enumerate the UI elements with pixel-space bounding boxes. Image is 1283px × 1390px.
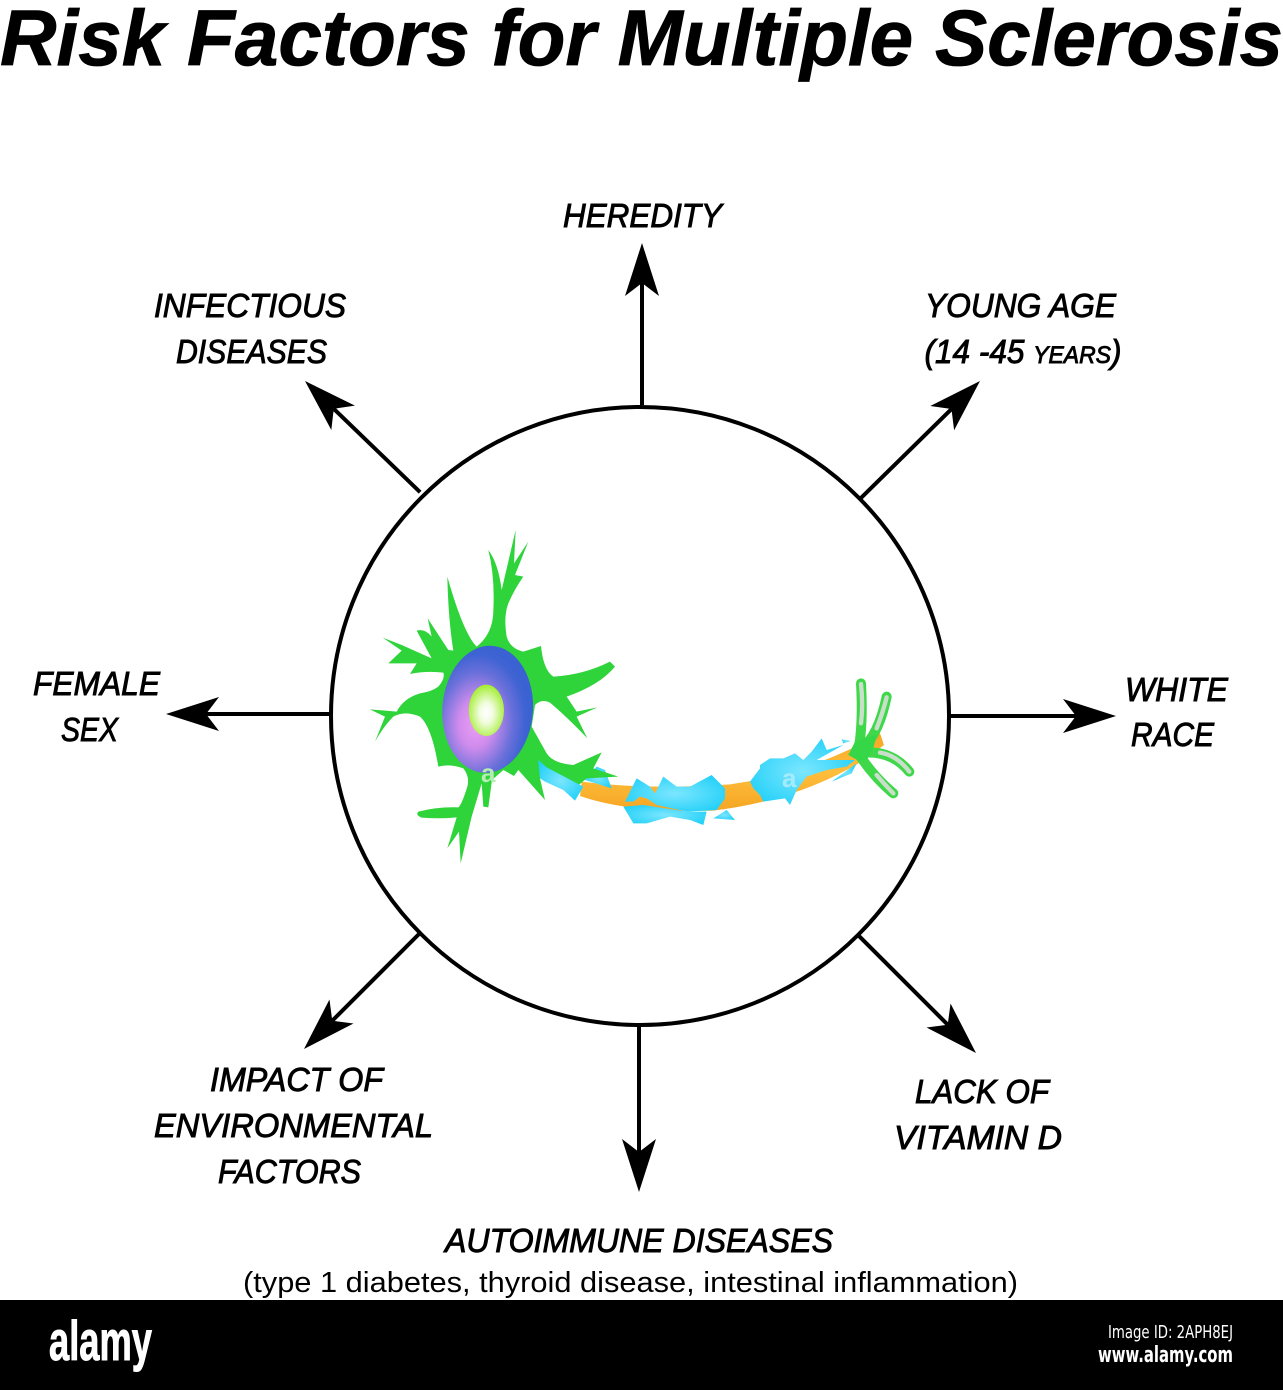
label: autoimmune diseases	[243, 1222, 1018, 1299]
label: lack of vitamin D	[894, 1073, 1062, 1156]
neuron illustration	[370, 530, 909, 863]
label: young age: (14 -45 YEARS)	[924, 333, 1122, 370]
arrow: autoimmune diseases	[622, 1026, 656, 1192]
nucleus	[469, 685, 504, 736]
footer logo: alamy	[49, 1309, 152, 1372]
footer bar	[0, 1300, 1283, 1390]
label: autoimmune diseases: AUTOIMMUNE DISEASES	[443, 1222, 833, 1259]
label: lack of vitamin D: VITAMIN D	[894, 1119, 1062, 1156]
image id: Image ID: 2APH8EJ	[1108, 1322, 1233, 1343]
axon core	[580, 733, 884, 811]
axon terminal hub	[848, 735, 877, 761]
label: environmental factors: FACTORS	[218, 1153, 361, 1190]
label: infectious diseases: DISEASES	[176, 333, 327, 370]
label: heredity: HEREDITY	[563, 197, 724, 234]
label: infectious diseases: INFECTIOUS	[154, 287, 346, 324]
arrow: female sex	[166, 697, 331, 731]
watermark letter on soma: a	[481, 758, 496, 788]
label: white race: WHITE	[1125, 671, 1229, 708]
label: lack of vitamin D: LACK OF	[915, 1073, 1051, 1110]
label: environmental factors: ENVIRONMENTAL	[154, 1107, 433, 1144]
arrow: lack of vitamin D	[846, 923, 988, 1065]
label: young age	[924, 287, 1122, 370]
myelin fragment at axon start	[538, 760, 583, 801]
myelin fragments	[585, 738, 857, 825]
label: infectious diseases	[154, 287, 346, 370]
soma	[438, 643, 537, 776]
arrow: young age	[849, 369, 992, 510]
label: environmental factors: IMPACT OF	[210, 1061, 385, 1098]
label: white race: RACE	[1131, 716, 1215, 753]
label: female sex	[33, 665, 161, 748]
axon terminal fingers	[858, 683, 909, 793]
arrow: white race	[949, 699, 1116, 733]
label: young age: YOUNG AGE	[925, 287, 1117, 324]
label: environmental factors	[154, 1061, 433, 1190]
arrow: environmental factors	[292, 922, 431, 1061]
label: white race	[1125, 671, 1229, 753]
label: female sex: SEX	[61, 711, 120, 748]
arrow: heredity	[625, 243, 659, 405]
dendrites and cell body	[370, 530, 618, 863]
arrow: infectious diseases	[293, 369, 432, 504]
watermark letter on axon: a	[782, 763, 797, 793]
label: autoimmune diseases: (type 1 diabetes, thyroid disease, intestinal inflammation)	[243, 1267, 1018, 1299]
central circle	[331, 407, 949, 1025]
label: female sex: FEMALE	[33, 665, 161, 702]
axon with damaged myelin	[580, 683, 909, 825]
